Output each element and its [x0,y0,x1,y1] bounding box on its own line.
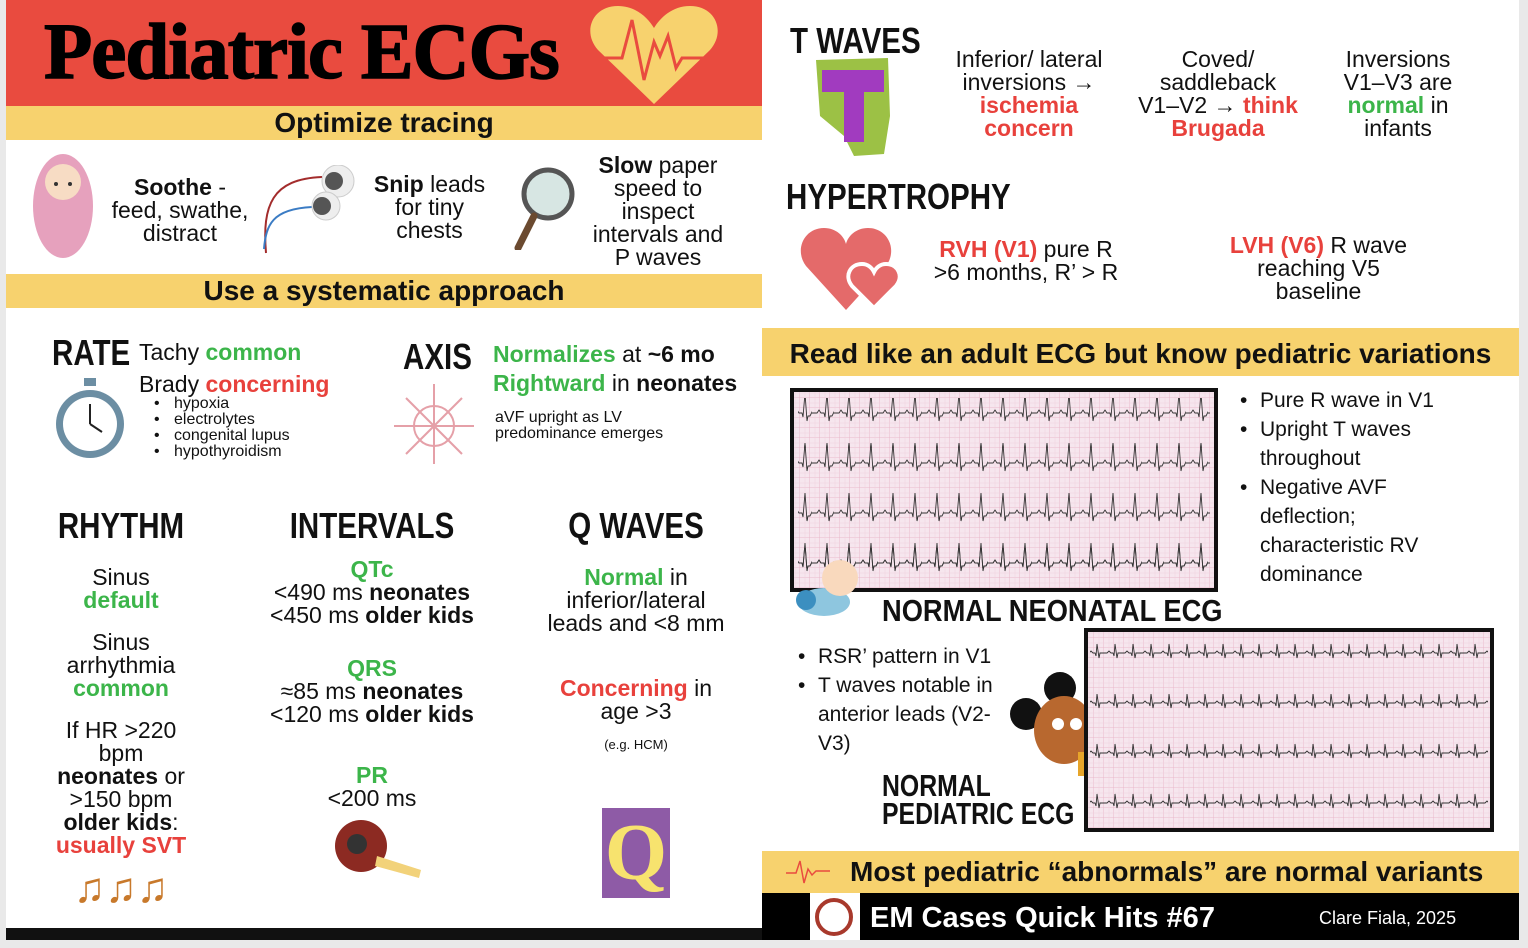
list: pediatric features: T waves notable in anterior leads (V2-V3) [818,674,993,755]
heading: read like adult: Read like an adult ECG but know pediatric variations [790,338,1491,369]
heading: INTERVALS [290,505,454,546]
text [560,675,712,724]
PR: PR [356,762,388,788]
icon: stopwatch [56,378,124,458]
left panel background [6,0,762,940]
text: speed to [614,175,702,201]
text: inversions: Inversions [1346,46,1450,72]
label: normal pediatric ECG [882,772,1074,828]
heading: RATE [52,332,130,373]
banner: normal variants [762,851,1519,893]
icon: heart with ECG [590,6,718,104]
section: rate [52,332,329,460]
text: coved: V1–V2 → think [1138,92,1298,118]
text: inferior: concern [984,115,1074,141]
text: bpm [99,740,143,766]
text: inversions: normal in [1348,92,1448,118]
heading: RHYTHM [58,505,184,546]
note [495,409,663,442]
list [154,395,290,460]
text [67,629,176,701]
right panel background [762,0,1519,940]
text: for tiny [395,194,464,220]
text: Concerning in [560,675,712,701]
text: intervals and [593,221,723,247]
QTc: QTc [350,556,394,582]
label: normal neonatal ECG: NORMAL NEONATAL ECG [882,593,1223,628]
text: inferior: Inferior/ lateral [955,46,1102,72]
PR: <200 ms [328,785,416,811]
chart: neonatal ECG [790,388,1218,592]
text: inferior [955,46,1102,141]
text: age >3 [600,698,672,724]
note: aVF upright as LV [495,409,622,426]
footer [762,893,1519,940]
heading: optimize tracing: Optimize tracing [274,107,494,138]
list: electrolytes [174,411,255,428]
heading: optimize tracing [6,106,762,140]
text: inspect [622,198,694,224]
text: inferior/lateral [566,587,706,613]
text: usually SVT [56,832,186,858]
text [547,564,725,636]
label: normal pediatric ECG: PEDIATRIC ECG [882,796,1074,831]
text: Slow paper [599,152,717,178]
heading: Q WAVES [568,505,704,546]
text: coved: Coved/ [1182,46,1254,72]
icon: swaddled baby [33,154,93,258]
text: Normalizes at ~6 mo [493,341,715,367]
text: RVH: >6 months, R’ > R [934,259,1118,285]
text: neonates or [57,763,185,789]
QRS: QRS [347,655,397,681]
icon: hearts [800,228,898,310]
heading: systematic approach [6,274,762,308]
title: Pediatric ECGs [44,9,559,96]
text: Tachy common [139,339,301,365]
text: inversions: infants [1364,115,1432,141]
tip: soothe [33,154,248,258]
text: common [73,675,169,701]
list: neonatal features: Pure R wave in V1 [1260,389,1434,412]
text: Sinus [92,629,150,655]
chart: pediatric ECG [1084,628,1494,832]
QTc: <490 ms neonates [274,579,470,605]
text: leads and <8 mm [547,610,725,636]
text: default [83,587,159,613]
text: P waves [615,244,701,270]
list: neonatal features: Negative AVF deflection; characteristic RV dominance [1260,476,1418,586]
text: Normal in [584,564,688,590]
note: (e.g. HCM) [604,737,668,752]
text: feed, swathe, [112,197,248,223]
text [56,717,186,858]
text: series: EM Cases Quick Hits #67 [870,902,1215,934]
text: LVH [1230,232,1407,304]
text: LVH: reaching V5 [1257,255,1380,281]
icon: girl peeking [1010,668,1090,778]
text: inferior: inversions → [963,69,1095,95]
text: Brady concerning [139,371,329,397]
bottom bar left [6,928,762,940]
text: If HR >220 [66,717,176,743]
PR [328,762,416,811]
text: inversions [1344,46,1452,141]
icon: music notes: ♫♫♫ [74,864,168,911]
text: arrhythmia [67,652,175,678]
label: normal pediatric ECG: NORMAL [882,768,991,803]
heading: systematic approach: Use a systematic approach [203,275,565,306]
icon: magnifier [514,168,574,250]
icon: T [816,58,890,156]
icon: axis arrows [394,384,474,464]
section: rhythm [56,505,186,911]
section: T waves [790,20,1452,156]
list: hypoxia [174,395,229,412]
QRS: <120 ms older kids [270,701,474,727]
list: congenital lupus [174,427,290,444]
text: LVH: baseline [1276,278,1361,304]
text [374,171,485,243]
text [83,564,159,613]
text: distract [143,220,217,246]
heading: T WAVES [790,20,921,61]
text [493,341,737,396]
icon: tape measure [335,820,421,878]
QRS [270,655,474,727]
text: RVH [934,236,1118,285]
text: >150 bpm [70,786,172,812]
QRS: ≈85 ms neonates [281,678,463,704]
text: coved [1138,46,1298,141]
text: Most pediatric “abnormals” are normal variants [850,856,1483,887]
list: neonatal features: Upright T waves throughout [1260,418,1411,470]
text: chests [396,217,463,243]
list: pediatric features [798,642,1008,758]
icon: leads [263,165,354,254]
text: Soothe - [134,174,226,200]
section: axis [394,336,737,464]
text: LVH: LVH (V6) R wave [1230,232,1407,258]
text: inversions: V1–V3 are [1344,69,1452,95]
text: older kids: [63,809,179,835]
text: Sinus [92,564,150,590]
heading: HYPERTROPHY [786,176,1011,217]
icon: ecg squiggle [786,859,830,885]
text [139,339,329,397]
text: Snip leads [374,171,485,197]
QTc [270,556,474,628]
list: neonatal features [1240,386,1455,589]
text: coved: saddleback [1160,69,1276,95]
tip: snip leads [263,165,485,254]
icon: logo [810,893,860,940]
text: coved: Brugada [1171,115,1265,141]
tip: slow paper [514,152,723,270]
title banner [6,0,762,106]
list: hypothyroidism [174,443,282,460]
section: q waves [547,505,725,898]
text: author: Clare Fiala, 2025 [1319,908,1456,928]
heading: AXIS [403,336,472,377]
text: inferior: ischemia [980,92,1078,118]
heading: read like adult [762,328,1519,376]
note: predominance emerges [495,425,663,442]
section: hypertrophy [786,176,1407,310]
text [112,174,248,246]
text: Rightward in neonates [493,370,737,396]
text: RVH: RVH (V1) pure R [939,236,1113,262]
icon: Q block: Q [605,809,667,897]
icon: crawling baby [788,556,870,620]
QTc: <450 ms older kids [270,602,474,628]
text [593,152,723,270]
list: pediatric features: RSR’ pattern in V1 [818,645,991,668]
section: intervals [270,505,474,878]
